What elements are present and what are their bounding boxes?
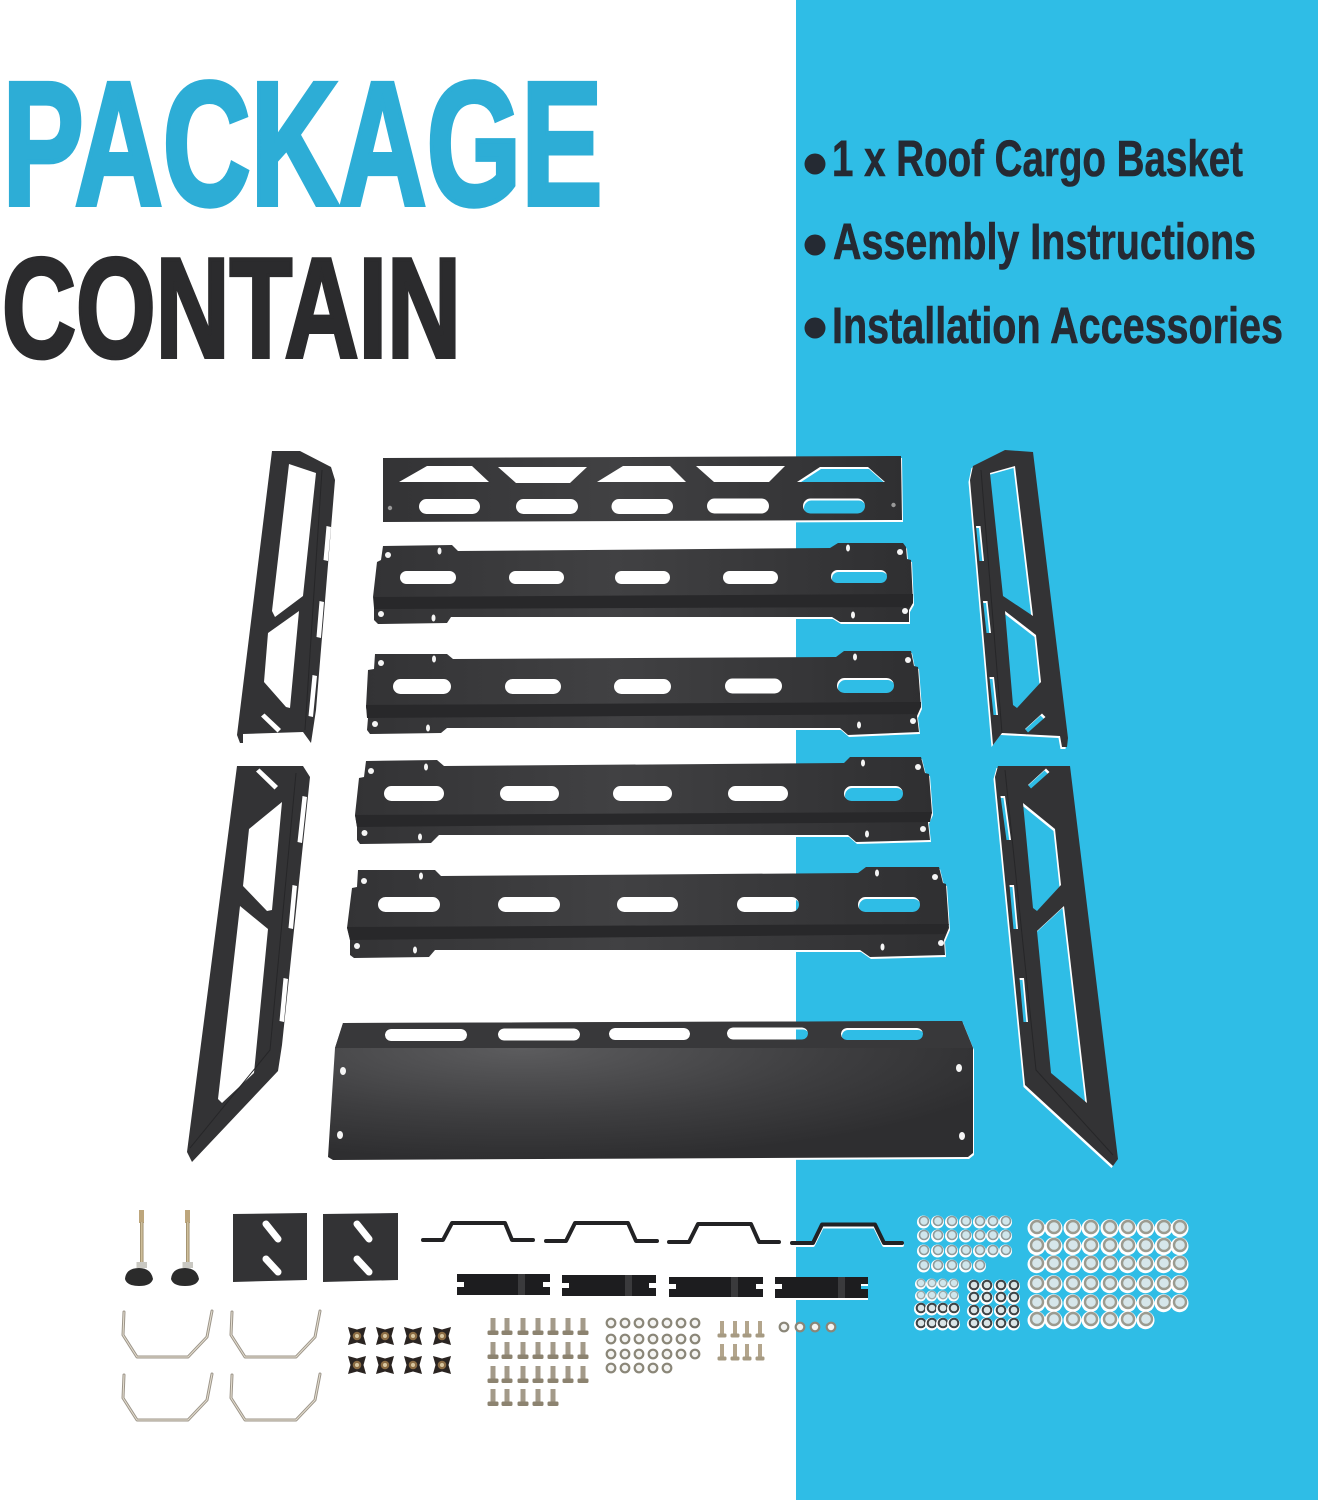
panel: blue right background bbox=[796, 0, 1318, 1500]
square nuts bbox=[348, 1327, 451, 1374]
side bracket: lower left bbox=[187, 766, 310, 1162]
spring washers block bbox=[914, 1278, 960, 1330]
title word: PACKAGE: PACKAGE bbox=[2, 46, 602, 242]
side bracket: upper left bbox=[237, 451, 335, 743]
small washers block bbox=[917, 1216, 1012, 1272]
large washers block bbox=[1028, 1219, 1188, 1329]
crossbar 3 bbox=[366, 651, 922, 737]
side bracket: lower right bbox=[994, 766, 1118, 1168]
long bolts bbox=[488, 1318, 588, 1406]
bent mounting plates bbox=[233, 1213, 398, 1282]
tie-down handles bbox=[423, 1223, 902, 1245]
hex nuts bbox=[607, 1319, 699, 1372]
title word: CONTAIN: CONTAIN bbox=[2, 229, 461, 388]
leveling feet bbox=[125, 1210, 199, 1286]
crossbar 1: trapezoid cut-outs bbox=[383, 456, 903, 524]
crossbar 4 bbox=[355, 757, 933, 846]
title bbox=[2, 46, 602, 388]
front wind deflector panel bbox=[328, 1021, 974, 1162]
crossbar 2 bbox=[373, 543, 914, 626]
rubber spacer blocks bbox=[457, 1274, 868, 1300]
loose nuts bbox=[780, 1323, 835, 1331]
short bolts bbox=[718, 1321, 764, 1360]
side bracket: upper right bbox=[968, 450, 1068, 749]
U-bolts bbox=[123, 1311, 320, 1420]
package contents list bbox=[804, 130, 1283, 354]
panel: white left background bbox=[0, 0, 796, 1500]
medium washers block bbox=[967, 1280, 1020, 1330]
crossbar 5 bbox=[347, 867, 950, 960]
